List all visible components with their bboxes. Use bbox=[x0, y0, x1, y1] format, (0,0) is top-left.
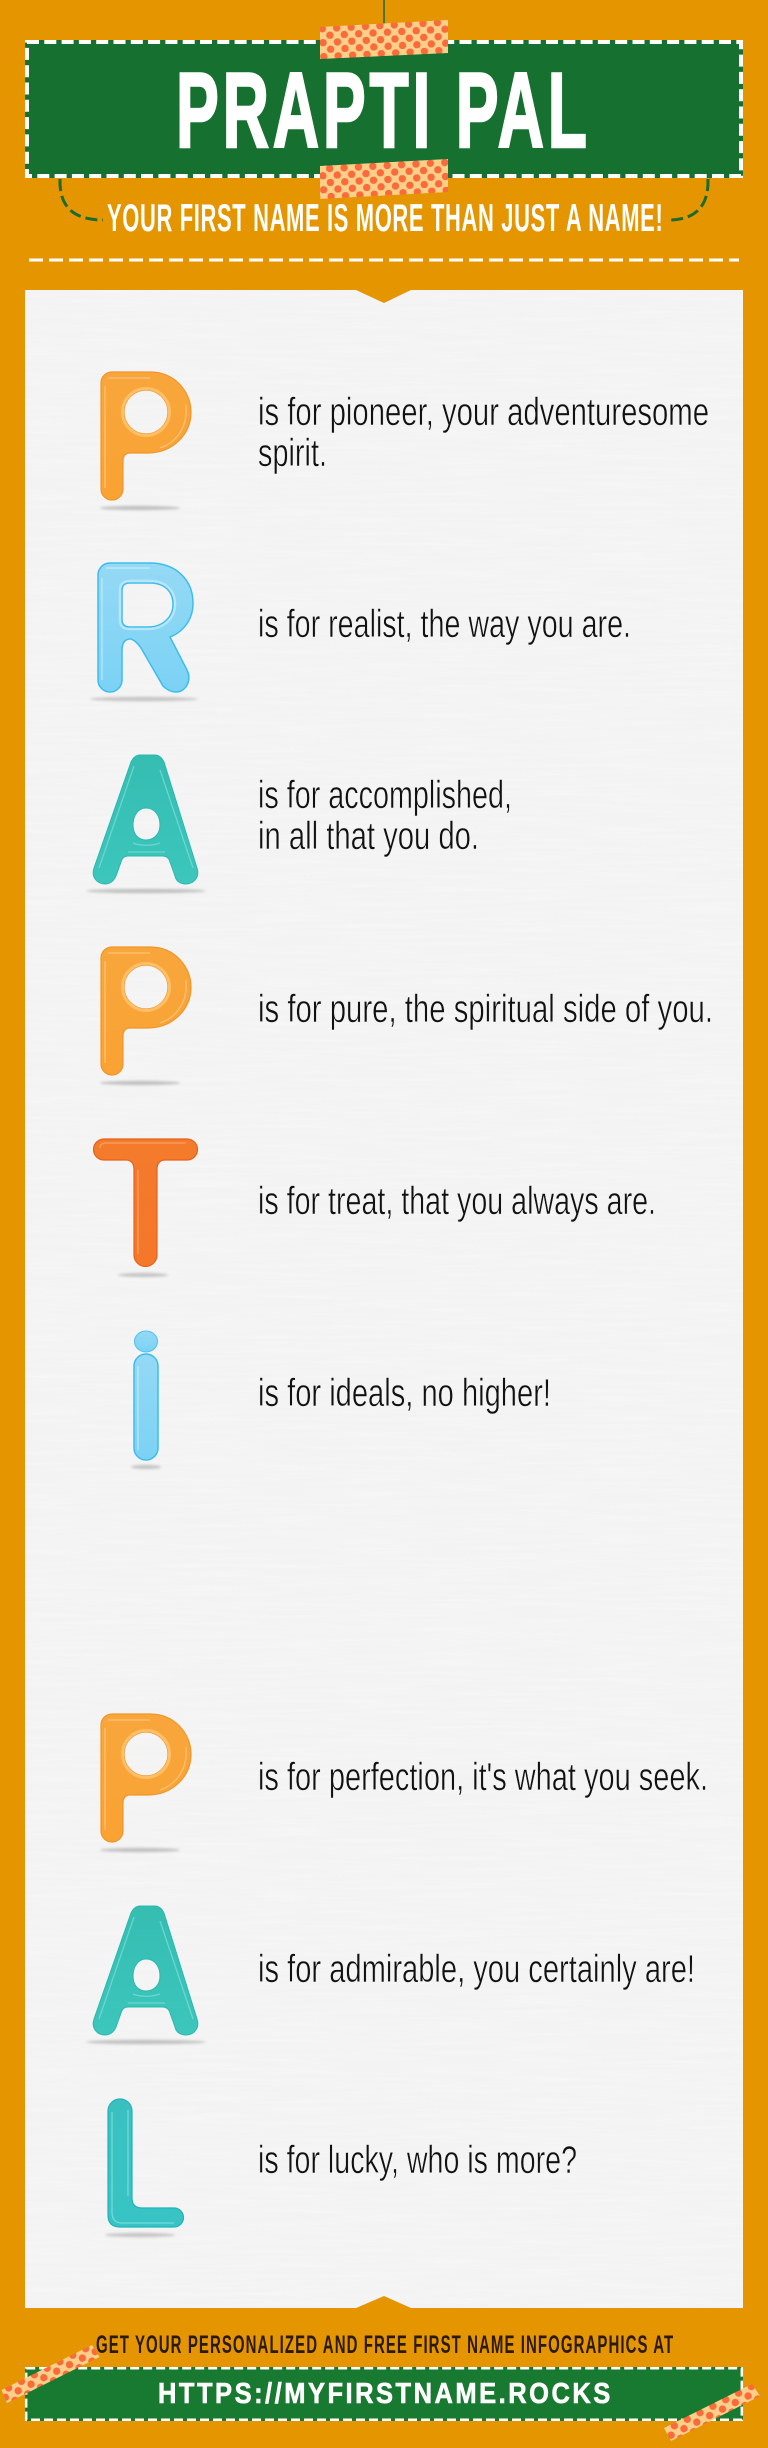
title banner bbox=[25, 40, 743, 178]
text: lucky: is for lucky, who is more? bbox=[258, 2139, 577, 2182]
row: P pure bbox=[100, 947, 713, 1085]
panel: letters bbox=[25, 290, 743, 2308]
icon: letter L bbox=[105, 2099, 184, 2237]
tape: footer left bbox=[2, 2345, 100, 2403]
tape: bottom of banner bbox=[320, 159, 448, 199]
text: accomplished: is for accomplished, bbox=[258, 774, 512, 817]
icon: letter P bbox=[100, 947, 191, 1085]
row: P pioneer bbox=[100, 372, 709, 510]
footer call to action: GET YOUR PERSONALIZED AND FREE FIRST NAME INFOGRAPHICS AT bbox=[96, 2331, 673, 2359]
row: R realist bbox=[90, 563, 631, 701]
icon: letter P bbox=[100, 372, 191, 510]
icon: letter T bbox=[94, 1139, 198, 1277]
row: i ideals bbox=[131, 1331, 551, 1469]
dashed connector left bbox=[60, 179, 103, 220]
row: A accomplished bbox=[86, 755, 512, 893]
title: PRAPTI PAL bbox=[176, 50, 587, 170]
icon: letter i bbox=[131, 1331, 161, 1469]
icon: letter R bbox=[90, 563, 198, 701]
text: pioneer bbox=[258, 391, 709, 475]
row: T treat bbox=[94, 1139, 656, 1277]
icon: letter P bbox=[100, 1714, 191, 1852]
row: P perfection bbox=[100, 1714, 708, 1852]
text: pioneer: spirit. bbox=[258, 432, 327, 475]
footer banner bbox=[25, 2367, 743, 2421]
icon: letter A bbox=[86, 755, 206, 893]
icon: letter A bbox=[86, 1906, 206, 2044]
tape: top of banner bbox=[320, 20, 448, 59]
dashed connector right bbox=[669, 179, 708, 220]
dashed divider bbox=[29, 258, 739, 262]
subtitle: YOUR FIRST NAME IS MORE THAN JUST A NAME! bbox=[107, 197, 663, 240]
text: accomplished bbox=[258, 774, 512, 858]
text: ideals: is for ideals, no higher! bbox=[258, 1372, 551, 1415]
row: L lucky bbox=[105, 2099, 577, 2237]
footer url: HTTPS://MYFIRSTNAME.ROCKS bbox=[158, 2376, 610, 2409]
text: realist: is for realist, the way you are. bbox=[258, 603, 631, 646]
tape: footer right bbox=[664, 2384, 760, 2441]
text: accomplished: in all that you do. bbox=[258, 815, 479, 858]
row: A admirable bbox=[86, 1906, 695, 2044]
hanging string bbox=[383, 0, 385, 24]
